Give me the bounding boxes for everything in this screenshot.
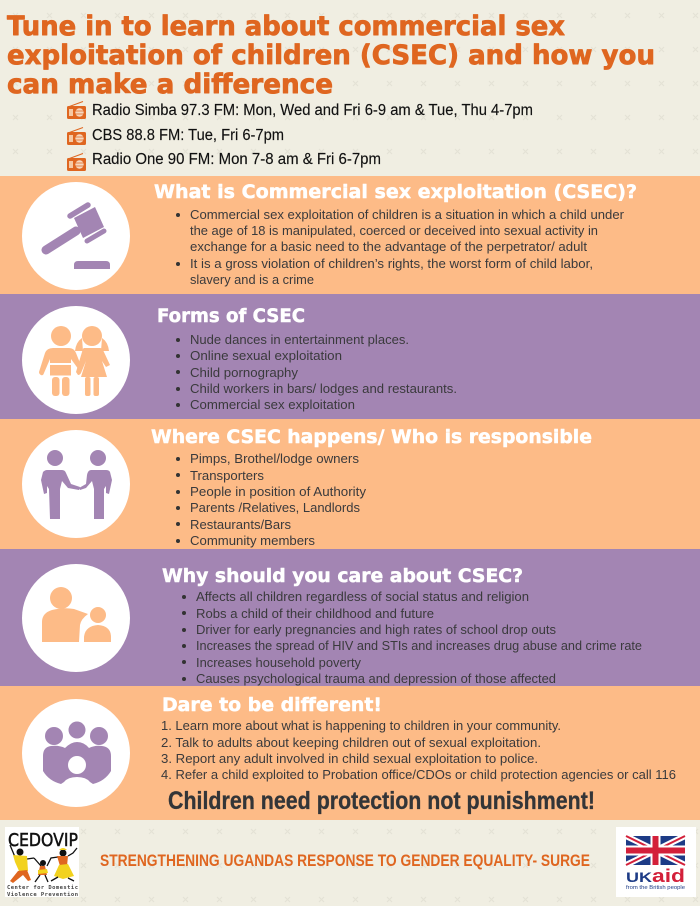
bullet list: Transporters — [190, 468, 264, 483]
bullet list — [182, 589, 642, 686]
bullet list: slavery and is a crime — [190, 272, 314, 287]
bullet list: Pimps, Brothel/lodge owners — [190, 451, 359, 466]
logo: UK aid — [616, 827, 696, 897]
icon: two people shaking hands — [22, 430, 130, 538]
numbered list: 3. Report any adult involved in child sexual exploitation to police. — [161, 751, 538, 766]
bullet list: Increases household poverty — [196, 655, 361, 670]
panel: where CSEC happens — [0, 419, 700, 549]
logo: UK aid: aid — [652, 866, 685, 886]
bullet list: Child pornography — [190, 365, 299, 380]
bullet list: Child workers in bars/ lodges and restaurants. — [190, 381, 457, 396]
bullet list: Restaurants/Bars — [190, 517, 291, 532]
logo: UK aid: from the British people — [626, 885, 685, 891]
footer text: STRENGTHENING UGANDAS RESPONSE TO GENDER EQUALITY- SURGE — [100, 851, 590, 870]
bullet list: Driver for early pregnancies and high rates of school drop outs — [196, 622, 556, 637]
numbered list: 1. Learn more about what is happening to children in your community. — [161, 718, 561, 733]
panel: dare to be different — [0, 686, 700, 820]
bullet list: exchange for a basic need to the advantage of the perpetrator/ adult — [190, 239, 587, 254]
left adult — [16, 848, 24, 856]
heading: Where CSEC happens/ Who is responsible — [151, 426, 592, 448]
bullet list — [176, 207, 625, 287]
bullet list: People in position of Authority — [190, 484, 367, 499]
icon: radio Simba — [67, 102, 86, 119]
bullet list: Online sexual exploitation — [190, 348, 342, 363]
icon: family group — [22, 699, 130, 807]
icon: radio CBS — [67, 128, 86, 145]
logo: CEDOVIP: Violence Prevention — [7, 892, 78, 898]
logo: CEDOVIP: Center for Domestic — [7, 885, 78, 891]
heading: Forms of CSEC — [157, 305, 305, 327]
title: can make a difference — [7, 69, 333, 100]
bullet list: Increases the spread of HIV and STIs and increases drug abuse and crime rate — [196, 638, 642, 653]
icon: gavel — [22, 182, 130, 290]
icon: two children — [22, 306, 130, 414]
panel: forms of CSEC — [0, 294, 700, 419]
title: Tune in to learn about commercial sex — [7, 11, 565, 42]
icon: adult and child — [22, 564, 130, 672]
numbered list — [161, 718, 676, 782]
radio schedule — [67, 102, 533, 171]
bullet list — [176, 451, 367, 548]
radio line: CBS: CBS 88.8 FM: Tue, Fri 6-7pm — [92, 127, 284, 144]
arms — [10, 845, 77, 866]
title: exploitation of children (CSEC) and how you — [7, 40, 655, 71]
bullet list: Commercial sex exploitation — [190, 397, 355, 412]
bullet list: the age of 18 is manipulated, coerced or deceived into sexual activity in — [190, 223, 598, 238]
radio line: Simba: Radio Simba 97.3 FM: Mon, Wed and Fri 6-9 am & Tue, Thu 4-7pm — [92, 102, 533, 119]
logo: CEDOVIP: CEDOVIP — [8, 830, 78, 851]
title — [7, 11, 655, 100]
bullet list: Affects all children regardless of social status and religion — [196, 589, 529, 604]
slogan: Children need protection not punishment! — [168, 787, 595, 815]
woman — [60, 850, 66, 856]
icon: radio One — [67, 154, 86, 171]
logo: UK aid: UK — [626, 869, 652, 885]
bullet list: Causes psychological trauma and depression of those affected — [196, 671, 556, 686]
heading: Why should you care about CSEC? — [162, 565, 523, 587]
numbered list: 4. Refer a child exploited to Probation office/CDOs or child protection agencies or call 116 — [161, 767, 676, 782]
heading: Dare to be different! — [162, 694, 382, 716]
bullet list: Community members — [190, 533, 316, 548]
radio line: Radio One: Radio One 90 FM: Mon 7-8 am & Fri 6-7pm — [92, 151, 381, 168]
bullet list — [176, 332, 457, 412]
bullet list: Parents /Relatives, Landlords — [190, 500, 361, 515]
child — [40, 860, 46, 866]
bullet list: Nude dances in entertainment places. — [190, 332, 409, 347]
panel: why care — [0, 549, 700, 686]
panel: what is CSEC — [0, 176, 700, 294]
heading: What is Commercial sex exploitation (CSEC)? — [154, 181, 637, 203]
bullet list: Robs a child of their childhood and future — [196, 606, 434, 621]
bullet list: It is a gross violation of children’s rights, the worst form of child labor, — [190, 256, 593, 271]
numbered list: 2. Talk to adults about keeping children out of sexual exploitation. — [161, 735, 541, 750]
logo: CEDOVIP — [5, 827, 79, 898]
bullet list: Commercial sex exploitation of children is a situation in which a child under — [190, 207, 625, 222]
